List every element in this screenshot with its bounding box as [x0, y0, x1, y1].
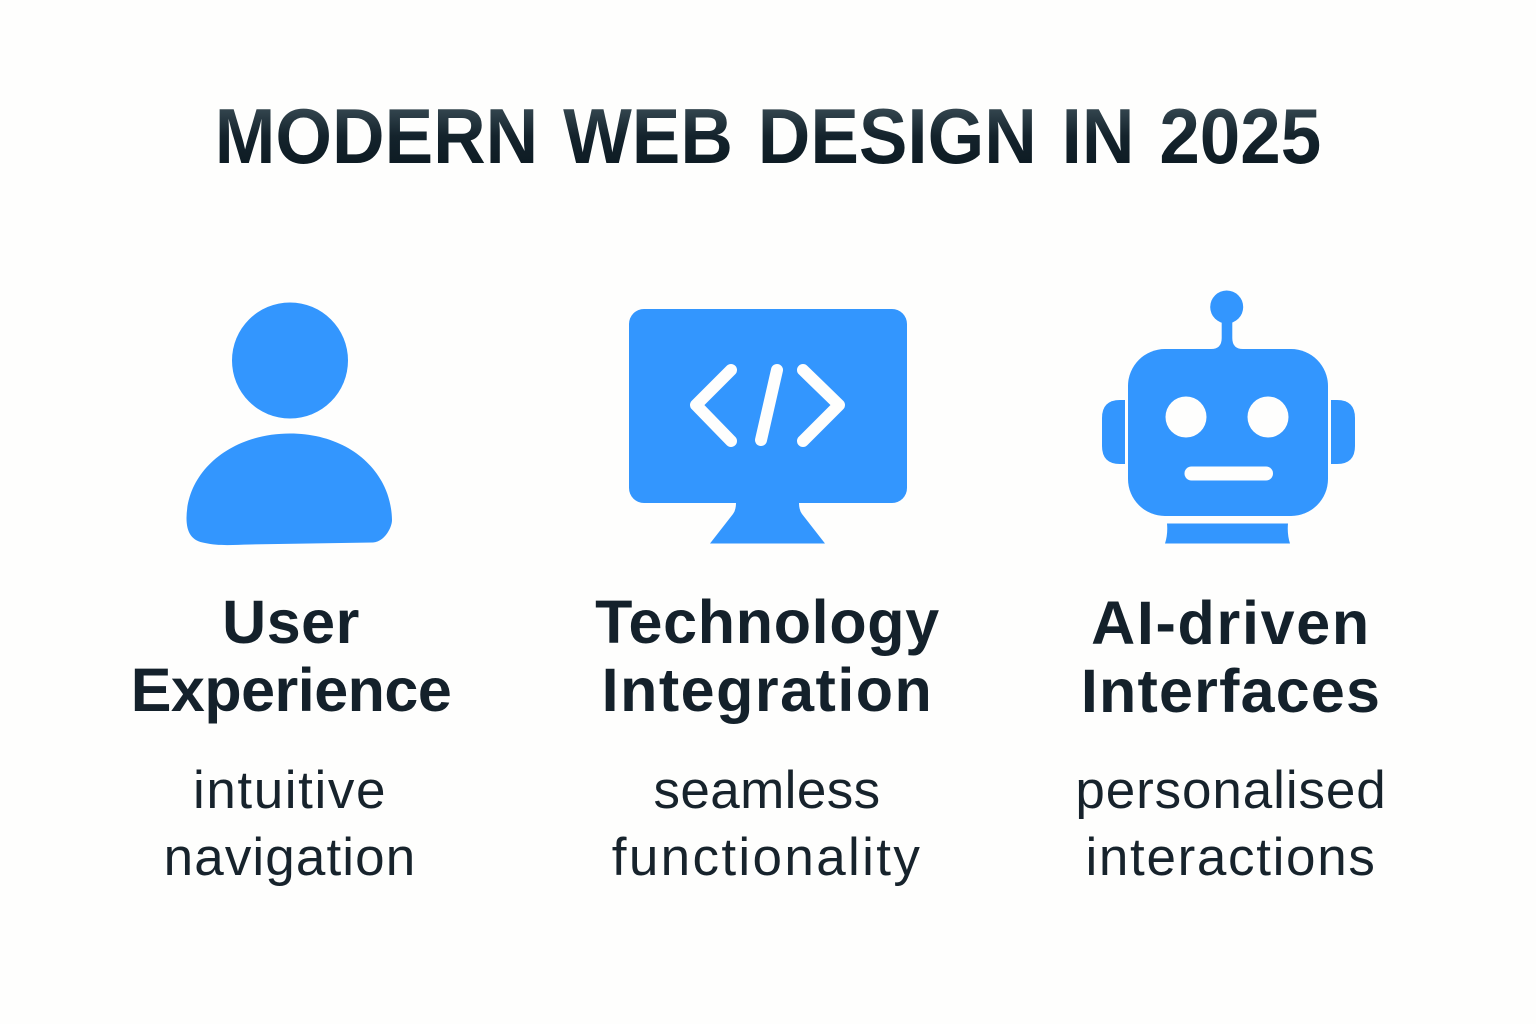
text: intuitive navigation: intuitive: [193, 761, 387, 820]
text: personalised interactions: [1075, 761, 1387, 887]
icon: monitor with code: [629, 309, 907, 544]
text: seamless functionality: [612, 761, 922, 887]
text: intuitive navigation: [164, 761, 416, 887]
heading: technology integration: Integration: [602, 656, 933, 724]
text: seamless functionality: functionality: [612, 828, 922, 887]
heading: user experience: User: [222, 588, 360, 656]
heading: ai-driven interfaces: Interfaces: [1081, 657, 1381, 725]
text: intuitive navigation: navigation: [164, 828, 416, 887]
icon: robot: [1102, 290, 1355, 544]
text: seamless functionality: seamless: [653, 761, 881, 820]
heading: user experience: Experience: [131, 656, 451, 724]
text: personalised interactions: interactions: [1085, 828, 1377, 887]
text: personalised interactions: personalised: [1075, 761, 1387, 820]
icon: user: [186, 302, 392, 545]
heading: ai-driven interfaces: AI-driven: [1091, 589, 1371, 657]
heading: user experience: [131, 588, 451, 724]
title: MODERN WEB DESIGN IN 2025: [215, 92, 1321, 180]
heading: technology integration: Technology: [595, 588, 940, 656]
heading: technology integration: [595, 588, 940, 724]
heading: ai-driven interfaces: [1081, 589, 1381, 725]
